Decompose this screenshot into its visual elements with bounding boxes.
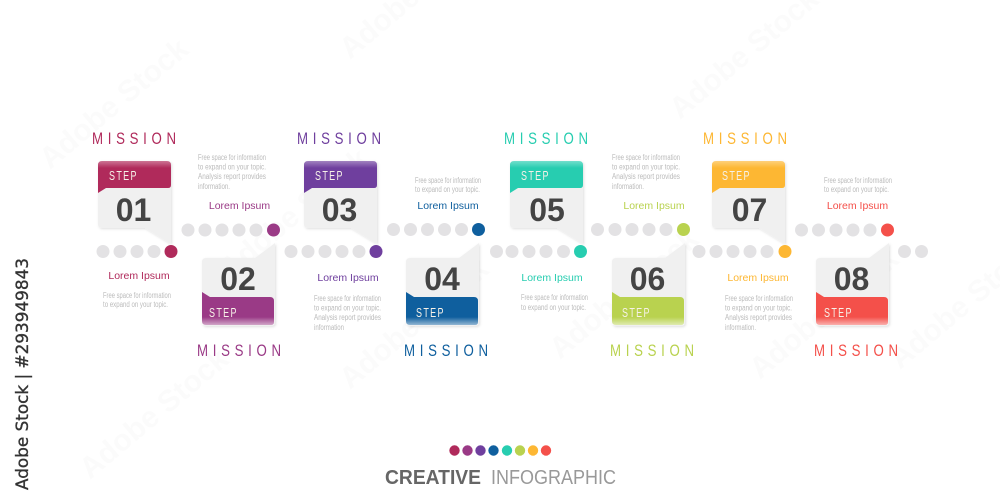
number 05: 05 [529, 192, 565, 228]
description 02: Free space for information [198, 153, 266, 162]
number 04: 04 [424, 261, 460, 297]
description 01: to expand on your topic. [103, 300, 168, 309]
step label 02: STEP [209, 307, 238, 320]
description 04 [415, 176, 481, 194]
step 08 [814, 176, 903, 360]
footer title [385, 467, 616, 489]
card 02 [202, 243, 275, 326]
card 03 [304, 161, 377, 244]
description 01 [103, 291, 171, 309]
description 03: to expand on your topic. [314, 304, 381, 312]
lorem label 06: Lorem Ipsum [623, 200, 685, 212]
step label 01: STEP [109, 170, 138, 183]
description 07: Analysis report provides [725, 313, 792, 322]
step 03 [297, 130, 386, 332]
dots row 1 [96, 245, 178, 258]
step 04 [404, 176, 493, 360]
step 07 [703, 130, 793, 332]
description 06: to expand on your topic. [612, 162, 680, 172]
mission heading 03: MISSION [297, 130, 386, 148]
step label 04: STEP [416, 307, 445, 320]
description 05: Free space for information [521, 293, 588, 302]
dots row 8 [795, 224, 928, 258]
lorem label 05: Lorem Ipsum [521, 272, 583, 284]
footer title: INFOGRAPHIC [491, 467, 616, 489]
description 01: Free space for information [103, 291, 171, 300]
dots row 3 [284, 245, 382, 258]
description 03: Analysis report provides [314, 313, 381, 322]
lorem label 04: Lorem Ipsum [417, 200, 479, 212]
description 07 [725, 294, 793, 332]
description 02: Analysis report provides [198, 172, 266, 181]
background watermarks: Adobe Stock [333, 252, 495, 395]
footer palette dots [449, 445, 551, 456]
flag 05 [510, 161, 583, 193]
description 03: information [314, 323, 344, 332]
description 07: to expand on your topic. [725, 304, 792, 312]
number 07: 07 [732, 192, 767, 228]
dots row 5 [490, 245, 587, 258]
lorem label 07: Lorem Ipsum [727, 272, 789, 284]
flag 08 [816, 292, 888, 325]
mission heading 08: MISSION [814, 342, 903, 360]
step label 05: STEP [521, 170, 550, 183]
lorem label 03: Lorem Ipsum [317, 272, 379, 284]
description 02 [198, 153, 266, 191]
description 03: Free space for information [314, 294, 381, 303]
description 05 [521, 293, 588, 312]
mission heading 07: MISSION [703, 130, 792, 148]
dots row 2 [182, 224, 280, 236]
lorem label 01: Lorem Ipsum [108, 270, 170, 282]
flag 03 [304, 161, 377, 193]
step 05 [504, 130, 593, 312]
description 07: Free space for information [725, 294, 793, 303]
description 08: Free space for information [824, 176, 892, 185]
card 01 [98, 161, 171, 244]
dots row 7 [692, 245, 792, 258]
step 02 [197, 153, 286, 360]
step label 06: STEP [622, 307, 651, 320]
step label 03: STEP [315, 170, 344, 183]
step label 08: STEP [824, 307, 853, 320]
flag 07 [712, 161, 785, 193]
description 04: Free space for information [415, 176, 481, 185]
dots row 4 [387, 223, 485, 236]
step 01 [92, 130, 181, 309]
description 05: to expand on your topic. [521, 303, 586, 312]
mission heading 01: MISSION [92, 130, 181, 148]
mission heading 06: MISSION [610, 342, 699, 360]
number 03: 03 [322, 192, 357, 228]
description 06: information. [612, 182, 644, 191]
description 07: information. [725, 323, 756, 332]
flag 06 [612, 292, 684, 325]
background watermarks: Adobe Stock [743, 242, 905, 385]
background watermarks: Adobe Stock [73, 342, 235, 485]
lorem label 08: Lorem Ipsum [827, 200, 888, 212]
description 06: Free space for information [612, 153, 680, 162]
flag 02 [202, 292, 274, 325]
number 08: 08 [834, 261, 869, 297]
dots row 6 [591, 223, 690, 236]
footer title: CREATIVE [385, 467, 481, 489]
description 06: Analysis report provides [612, 172, 680, 181]
description 06 [612, 153, 680, 191]
number 02: 02 [220, 261, 256, 297]
lorem label 02: Lorem Ipsum [209, 200, 270, 212]
number 01: 01 [116, 192, 151, 228]
description 02: to expand on your topic. [198, 162, 266, 172]
card 05 [510, 161, 583, 244]
description 03 [314, 294, 381, 332]
flag 01 [98, 161, 171, 193]
description 08 [824, 176, 892, 194]
card 06 [612, 243, 685, 326]
mission heading 05: MISSION [504, 130, 593, 148]
card 04 [406, 243, 479, 326]
background watermarks: Adobe Stock [543, 222, 705, 365]
background watermarks: Adobe Stock [213, 142, 375, 285]
background watermarks: Adobe Stock [33, 32, 195, 175]
description 02: information. [198, 182, 230, 191]
description 04: to expand on your topic. [415, 185, 480, 194]
mission heading 04: MISSION [404, 342, 493, 360]
card 08 [816, 243, 889, 326]
mission heading 02: MISSION [197, 342, 286, 360]
card 07 [712, 161, 785, 244]
description 08: to expand on your topic. [824, 185, 889, 194]
flag 04 [406, 292, 478, 325]
stock id side label: Adobe Stock | #293949843 [13, 258, 33, 490]
number 06: 06 [630, 261, 665, 297]
step label 07: STEP [722, 170, 751, 183]
step 06 [610, 153, 699, 360]
